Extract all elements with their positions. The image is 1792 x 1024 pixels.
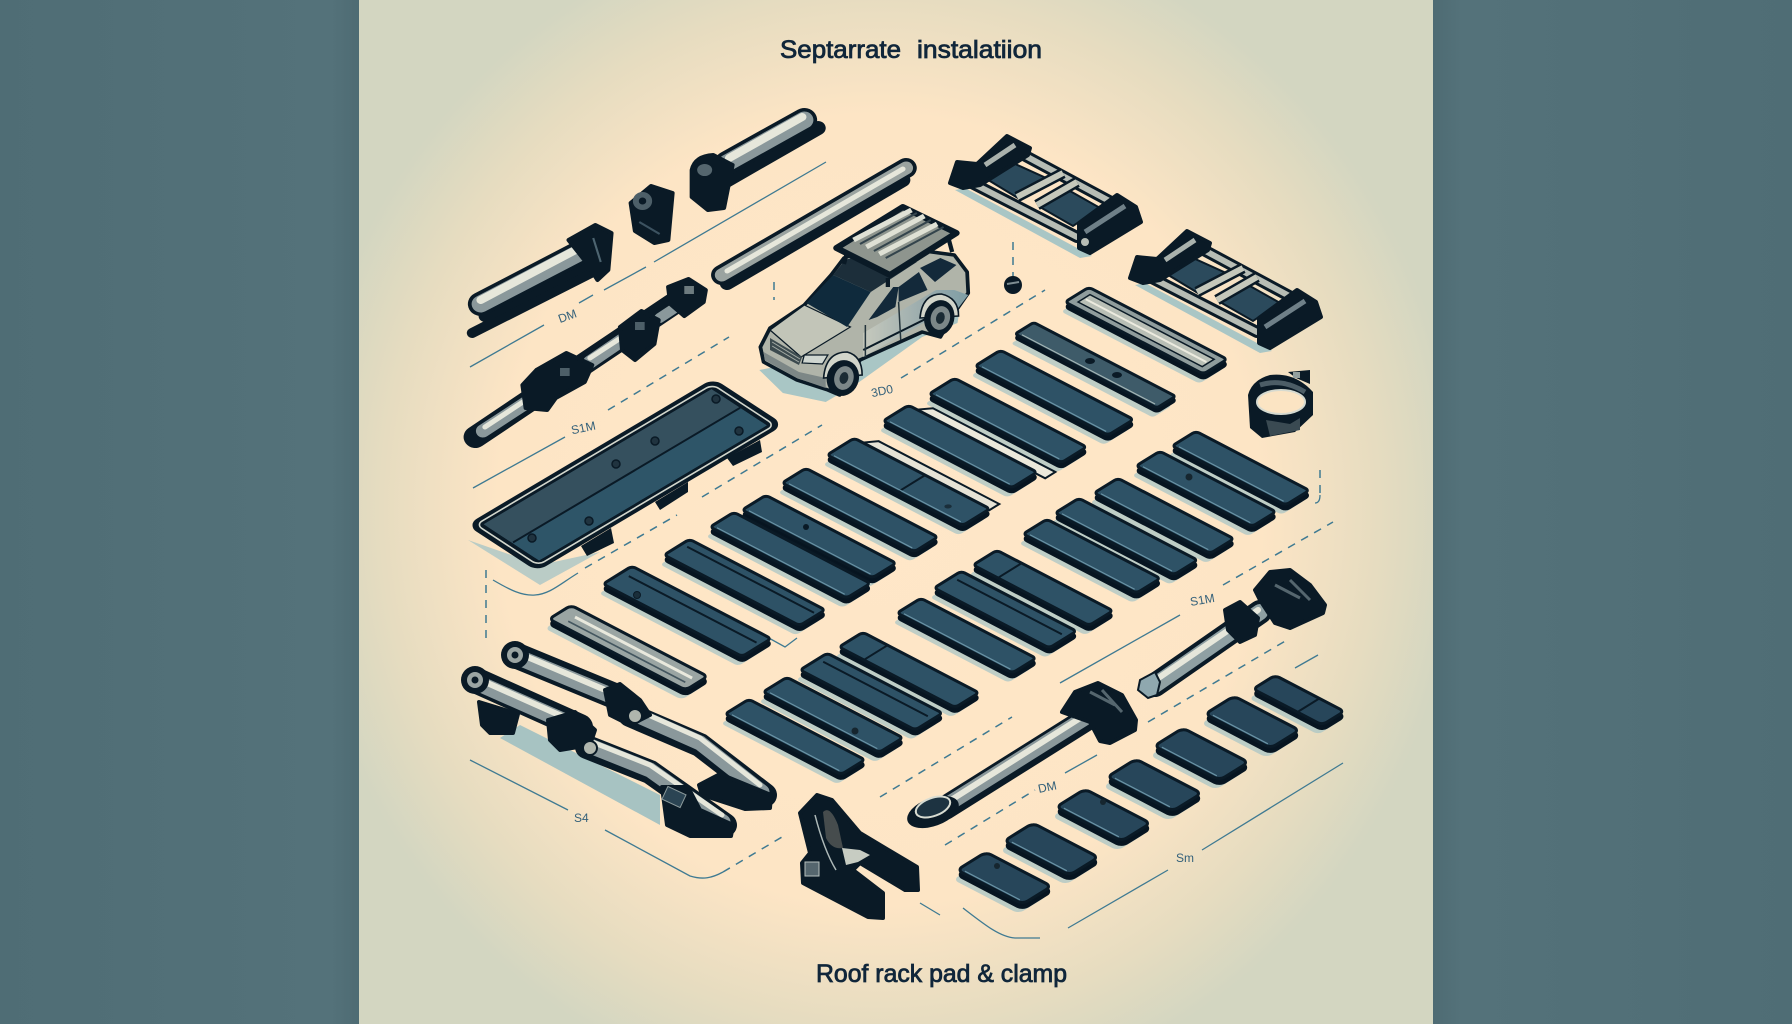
dimension lines and labels: Sm: [1176, 851, 1194, 865]
center panel: [359, 0, 1433, 1024]
clamp arms assembly: [461, 641, 771, 836]
front arm: [461, 666, 733, 836]
car headlight: [802, 355, 828, 364]
car windshield: [806, 275, 871, 327]
drilled plate: [1005, 322, 1182, 417]
car front wheel: [823, 357, 863, 399]
car side windows: [869, 258, 956, 320]
car roof: [833, 248, 917, 292]
car shadow: [759, 310, 960, 402]
car hood: [770, 305, 850, 357]
car with roof rack: [759, 207, 968, 402]
pad 16 bolt: [803, 524, 809, 530]
board shadow: [468, 540, 600, 585]
pad 2 bolt: [1186, 474, 1192, 480]
metal channel upper right: [1055, 287, 1233, 384]
car sill: [863, 318, 928, 350]
ladder cross bars: [1017, 173, 1077, 205]
ladder shadow: [955, 188, 1092, 258]
pad 11 bolt: [852, 728, 858, 734]
car grille: [770, 338, 802, 365]
part: small clamp block: [631, 186, 673, 243]
pad 6: [963, 550, 1119, 635]
short pad 5: [1144, 728, 1255, 790]
pad 16: [732, 495, 902, 587]
short pad 1: [947, 852, 1058, 914]
Y bracket: [800, 795, 918, 918]
ladder panels: [1165, 258, 1280, 321]
pad 1: [1162, 431, 1316, 515]
left background band: [0, 0, 359, 1024]
pad 10: [790, 653, 949, 740]
short pad 7: [1243, 675, 1350, 735]
dimension lines and labels: S1M: [1189, 591, 1216, 609]
short pad 6: [1195, 696, 1306, 758]
short pad 2: [994, 823, 1105, 885]
pad 9: [829, 632, 985, 717]
ladder bracket top: [950, 136, 1141, 258]
pad 21: [965, 350, 1140, 445]
pad 15: [700, 512, 877, 608]
wrench tool: [903, 683, 1136, 834]
ladder end left: [1130, 231, 1210, 283]
short pads row: [947, 675, 1350, 914]
board clips: [581, 440, 762, 556]
car rear wheel: [921, 297, 958, 339]
ladder bracket right: [1130, 231, 1321, 353]
pad 2: [1126, 451, 1282, 536]
dimension lines and labels: [470, 162, 1343, 938]
part: top tube with clamp: [692, 117, 818, 210]
rod with top clamp: [1138, 570, 1325, 698]
dimension lines and labels: DM: [1037, 778, 1058, 796]
pad 5: [1013, 519, 1167, 603]
pad 7: [924, 571, 1083, 658]
dimension lines and labels: S1M: [570, 419, 597, 437]
ladder cross bars: [1197, 268, 1257, 300]
car wheel arches: [824, 294, 959, 378]
metal channel lower left: [539, 605, 714, 700]
dimension lines and labels: DM: [556, 306, 579, 326]
ladder rails: [972, 153, 1113, 237]
pad 12: [715, 699, 871, 784]
car door panel: [863, 290, 968, 357]
pad 8: [887, 598, 1042, 683]
pad 19 with pale strip: [873, 400, 1055, 499]
dimension lines and labels: S4: [574, 811, 589, 825]
pad row: upper: [593, 350, 1140, 666]
pad 20: [919, 378, 1093, 472]
back arm: [501, 641, 771, 809]
pad 17: [772, 468, 944, 561]
part: rod with clamps: [475, 279, 706, 437]
board plate: [470, 381, 781, 569]
pad 11: [753, 677, 909, 762]
ladder end right: [1079, 195, 1141, 253]
short pad 4: [1097, 759, 1208, 821]
pad 14: [654, 539, 831, 635]
pad 13: [593, 566, 777, 666]
ladder panels: [985, 163, 1100, 226]
car bumper: [764, 352, 826, 388]
arm shadow: [500, 725, 660, 825]
right background band: [1433, 0, 1792, 1024]
ladder end left: [950, 136, 1030, 188]
roof rack: [836, 207, 956, 287]
ring strap clamp: [1248, 370, 1313, 438]
board bolts: [528, 395, 743, 542]
short pad bolts: [994, 799, 1106, 869]
pad 3: [1084, 478, 1240, 563]
part: left tube with end clamp: [472, 225, 611, 333]
short pad 3: [1046, 789, 1157, 851]
ladder shadow: [1135, 283, 1272, 353]
pad 4: [1045, 498, 1204, 584]
title: Septarrate: [780, 36, 901, 64]
title: instalatiion: [917, 36, 1042, 64]
ladder rails: [1152, 248, 1293, 332]
part: long rail: [722, 168, 906, 283]
small bolt: [1004, 276, 1022, 294]
title: [780, 36, 1042, 64]
pad 13 bolt: [634, 592, 640, 598]
pad row: lower: [715, 632, 985, 784]
pad row: right: [887, 431, 1316, 683]
pad 18 with pale strip and divider: [817, 433, 1005, 535]
car body: [760, 245, 968, 395]
left large board: [468, 381, 781, 585]
dimension lines and labels: 3D0: [870, 382, 895, 400]
ladder end right: [1259, 290, 1321, 348]
caption: Roof rack pad & clamp: [816, 960, 1067, 988]
